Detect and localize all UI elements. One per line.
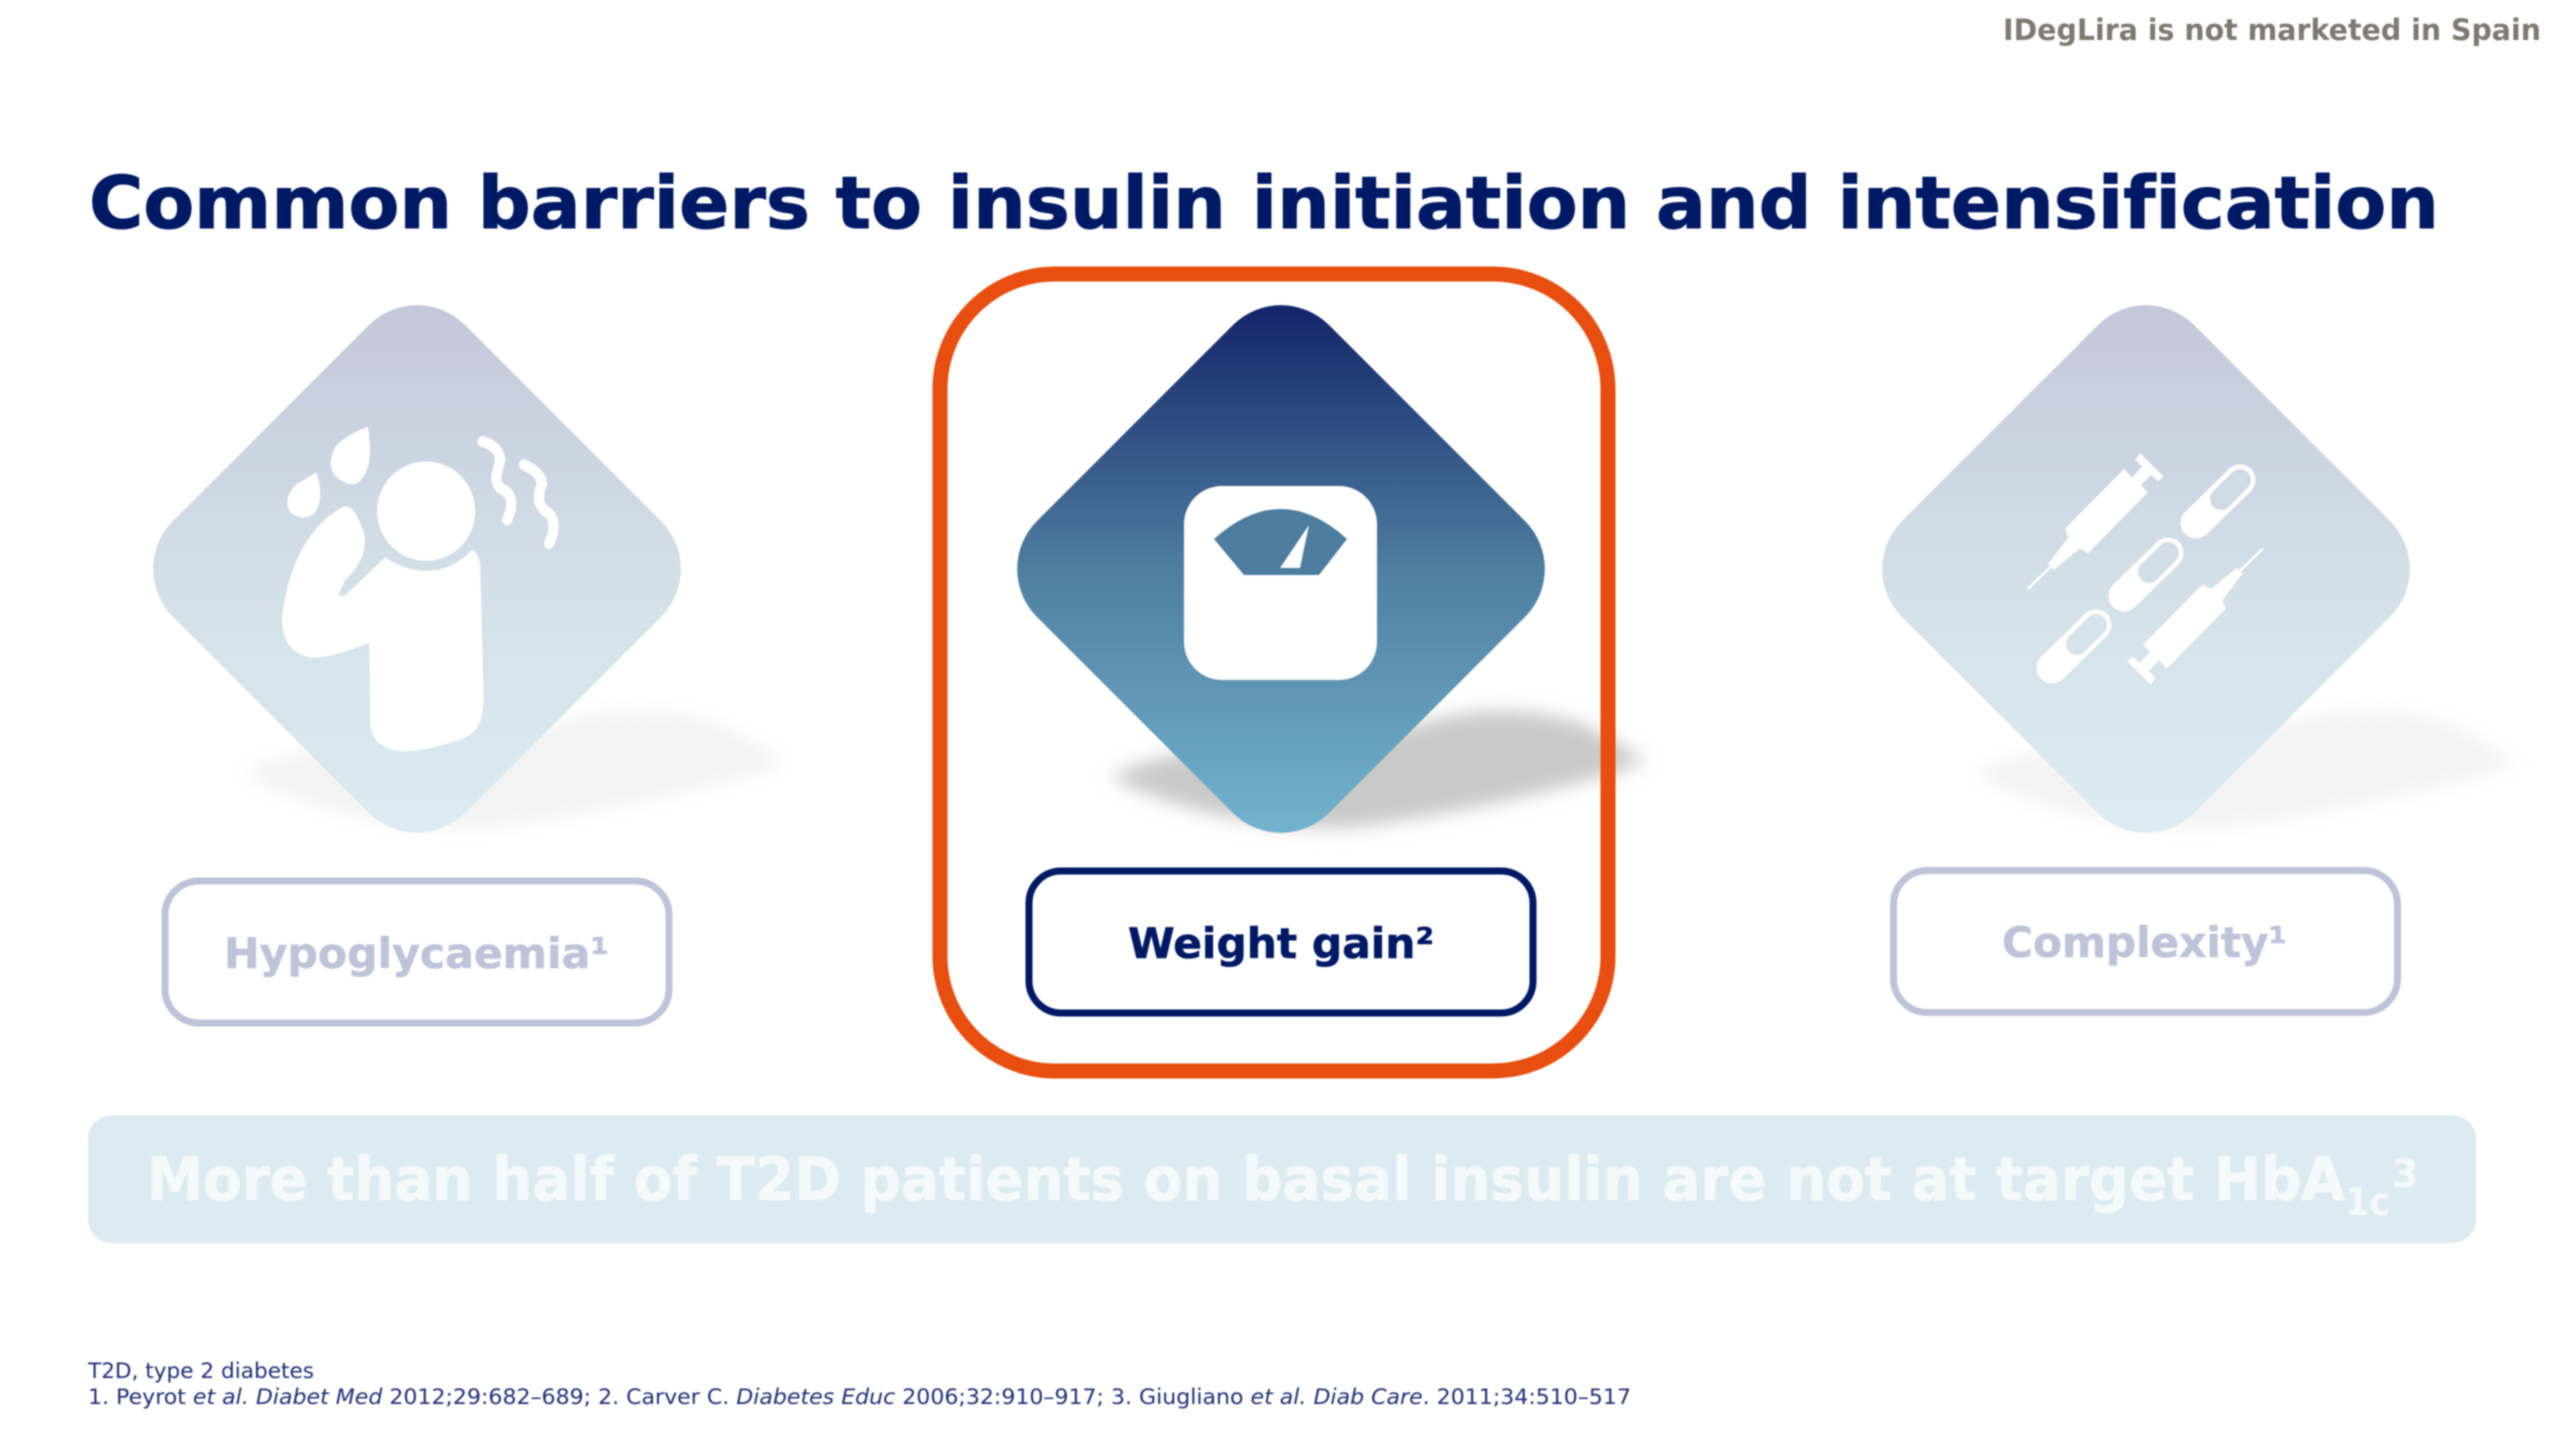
callout banner [88, 1115, 2476, 1243]
shadow: hypoglycaemia [244, 711, 786, 828]
icon: sweating person [282, 427, 554, 751]
label box: hypoglycaemia [165, 881, 669, 1023]
title: Common barriers to insulin initiation and intensification [89, 161, 2439, 245]
shadow: weight gain [1111, 711, 1645, 828]
market note: IDegLira is not marketed in Spain [2003, 13, 2541, 47]
panel: hypoglycaemia [153, 305, 786, 1023]
label: weight gain: Weight gain² [1128, 919, 1434, 968]
highlight frame: weight gain [940, 274, 1608, 1071]
icon: weighing scale [1184, 486, 1377, 680]
callout text: More than half of T2D patients on basal insulin are not at target HbA [147, 1145, 2346, 1215]
diamond: hypoglycaemia [153, 305, 681, 833]
subscript: 1c [2345, 1180, 2390, 1224]
superscript: 3 [2392, 1152, 2418, 1196]
footnote: references: 1. Peyrot et al. Diabet Med 2012;29:682–689; 2. Carver C. Diabetes Educ 2006;32:910–917; 3. Giugliano et al. Diab Care. 2011;34:510–517 [88, 1385, 1631, 1409]
panel: weight gain [1017, 305, 1645, 1013]
footnote: abbreviation: T2D, type 2 diabetes [87, 1359, 314, 1383]
label box: complexity [1894, 870, 2398, 1012]
label: complexity: Complexity¹ [2002, 918, 2287, 967]
panel: complexity [1882, 305, 2516, 1012]
diamond: weight gain [1017, 305, 1545, 833]
shadow: complexity [1974, 711, 2516, 828]
label: hypoglycaemia: Hypoglycaemia¹ [224, 929, 609, 978]
label box: weight gain [1029, 871, 1533, 1013]
icon: syringes and capsules [2028, 453, 2263, 685]
diamond: complexity [1882, 305, 2410, 833]
